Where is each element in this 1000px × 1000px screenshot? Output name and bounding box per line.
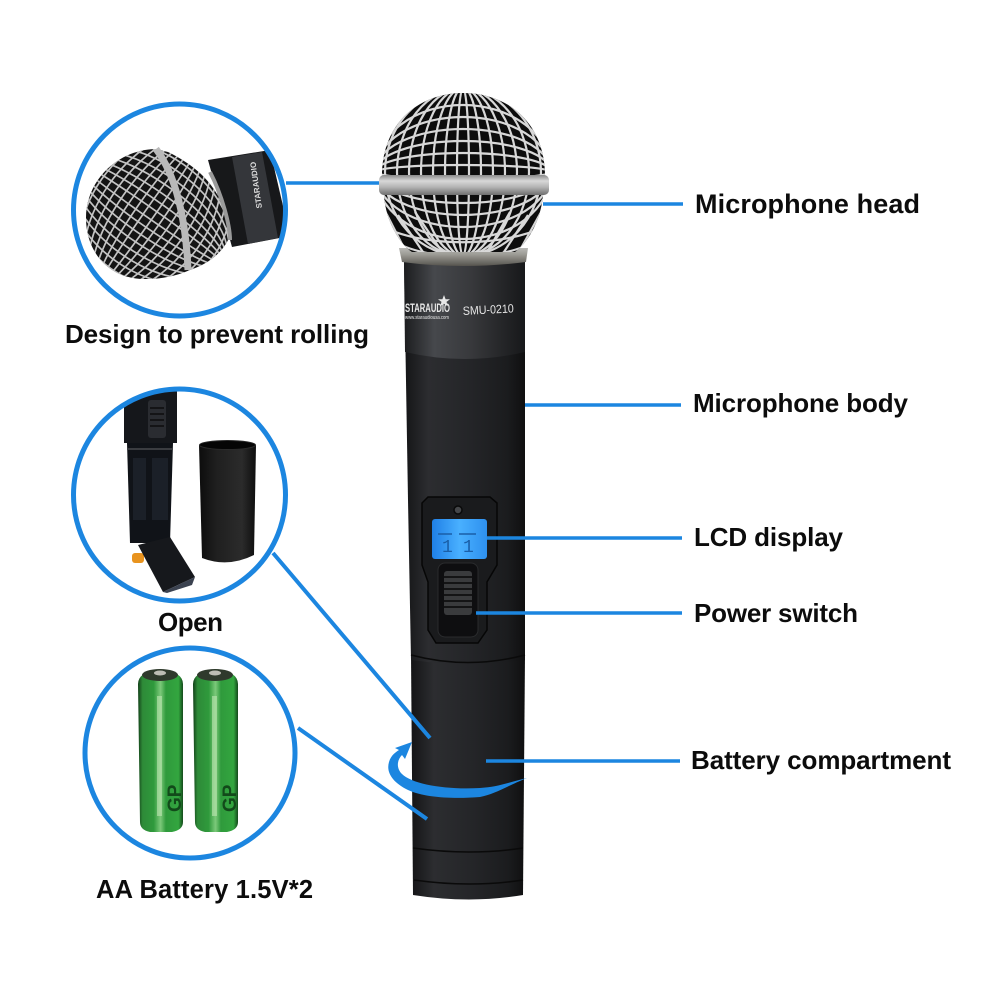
detail image: tilted microphone head	[86, 147, 283, 279]
label: LCD display: LCD display	[694, 522, 844, 552]
label: microphone body: Microphone body	[693, 388, 909, 418]
callout line: LCD display	[487, 536, 682, 540]
power switch	[438, 563, 478, 637]
model number: SMU-0210	[462, 301, 514, 318]
detail image: tilted microphone head: STARAUDIO	[249, 161, 264, 209]
callout line: rolling detail to microphone	[286, 181, 383, 185]
microphone	[375, 88, 551, 900]
circle outline	[74, 389, 286, 601]
brand logo: www.staraudiousa.com	[404, 315, 449, 321]
brand logo	[404, 295, 450, 321]
callout line: open compartment	[273, 553, 430, 738]
caption: AA Battery 1.5V*2	[96, 876, 313, 904]
battery 1: GP	[165, 784, 186, 812]
panel: open compartment	[74, 385, 286, 637]
grille ring	[379, 175, 549, 195]
panel: AA battery	[85, 648, 313, 904]
caption: Open	[158, 607, 223, 637]
battery 2	[193, 669, 241, 832]
battery 1	[138, 669, 186, 832]
callout line: AA battery	[298, 728, 427, 819]
LCD screen: 1	[463, 538, 474, 558]
battery cover sleeve	[199, 442, 256, 562]
label: power switch: Power switch	[694, 598, 858, 628]
panel: design to prevent rolling	[66, 102, 368, 348]
LCD screen	[432, 519, 487, 559]
circle outline	[74, 104, 286, 316]
body seams	[411, 655, 525, 884]
circle outline	[85, 648, 295, 858]
label: microphone head: Microphone head	[695, 189, 920, 219]
LCD screen: 1	[442, 538, 453, 558]
callout line: power switch	[476, 611, 682, 615]
callout line: microphone head	[543, 202, 683, 206]
battery 2: GP	[220, 784, 241, 812]
callout line: microphone body	[525, 403, 681, 407]
microphone neck band	[404, 262, 525, 359]
caption: Design to prevent rolling	[65, 319, 369, 349]
callout line: battery compartment	[486, 759, 680, 763]
arrow: twist direction	[388, 742, 527, 798]
microphone upper body	[404, 262, 525, 664]
brand logo: STARAUDIO	[405, 303, 450, 315]
detail image: open microphone and sleeve	[124, 385, 256, 593]
microphone grille head	[375, 88, 551, 266]
label: battery compartment: Battery compartment	[691, 745, 951, 775]
control panel	[422, 497, 497, 643]
microphone lower body	[411, 655, 525, 900]
